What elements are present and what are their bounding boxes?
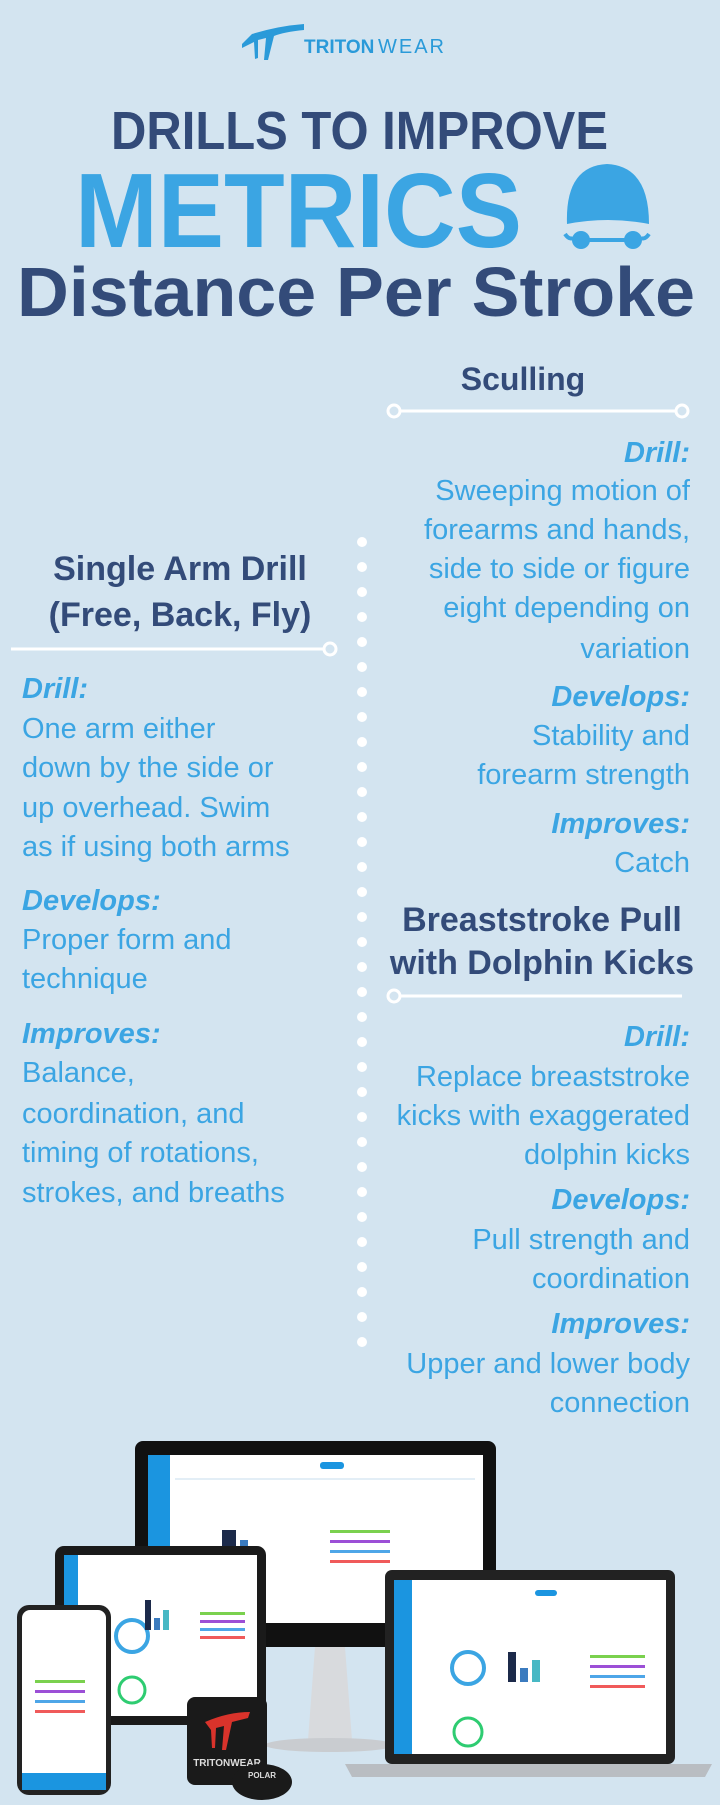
text: breaststroke details: Develops: [551, 1184, 690, 1216]
phone [17, 1605, 111, 1795]
text: single arm details: Develops: [22, 885, 161, 917]
text: breaststroke details: Drill: [624, 1021, 690, 1053]
divider: sculling line [386, 404, 690, 418]
text: breaststroke details: coordination [532, 1263, 690, 1295]
heading: Breaststroke Pull: with Dolphin Kicks [390, 944, 694, 982]
title: Distance Per Stroke [17, 253, 695, 330]
text: sculling details: Sweeping motion of [435, 475, 690, 507]
title: DRILLS TO IMPROVE [111, 101, 608, 161]
text: single arm details: Proper form and [22, 924, 232, 956]
text: sculling details: Develops: [551, 681, 690, 713]
text: breaststroke details: kicks with exaggerated [397, 1100, 690, 1132]
text: sculling details: forearm strength [477, 759, 690, 791]
heading: Single Arm Drill [49, 550, 311, 634]
text: single arm details: One arm either [22, 713, 215, 745]
divider: breaststroke line [386, 988, 682, 1004]
text: single arm details: Balance, [22, 1057, 135, 1089]
text: breaststroke details: Upper and lower body [406, 1348, 690, 1380]
text: single arm details: strokes, and breaths [22, 1177, 285, 1209]
icon: swim cap with goggles [563, 164, 651, 249]
text: sculling details: forearms and hands, [424, 514, 690, 546]
text: breaststroke details: connection [550, 1387, 690, 1419]
tablet [55, 1546, 266, 1725]
laptop [345, 1570, 712, 1777]
heading: Breaststroke Pull: Breaststroke Pull [402, 901, 682, 939]
logo: WEAR [378, 36, 446, 58]
text: sculling details: side to side or figure [429, 553, 690, 585]
heading: Single Arm Drill: (Free, Back, Fly) [49, 596, 311, 634]
text: single arm details: timing of rotations, [22, 1137, 259, 1169]
title [17, 101, 695, 330]
heading: Breaststroke Pull [390, 901, 694, 982]
text: sculling details: Catch [614, 847, 690, 879]
sensor: TRITONWEAR [193, 1758, 262, 1769]
text: sculling details: variation [580, 633, 690, 665]
text: breaststroke details: Pull strength and [472, 1224, 690, 1256]
title: METRICS [75, 152, 522, 270]
heart rate sensor: POLAR [248, 1771, 276, 1780]
text: sculling details [424, 437, 690, 879]
text: breaststroke details: Replace breaststroke [416, 1061, 690, 1093]
text: single arm details: technique [22, 963, 148, 995]
divider: single arm line [11, 642, 338, 656]
logo: TRITON [304, 37, 374, 58]
text: single arm details: Drill: [22, 673, 88, 705]
text: single arm details: down by the side or [22, 752, 273, 784]
text: single arm details: as if using both arms [22, 831, 290, 863]
text: breaststroke details: Improves: [551, 1308, 690, 1340]
heading: Single Arm Drill: Single Arm Drill [53, 550, 307, 588]
text: breaststroke details [397, 1021, 690, 1419]
text: single arm details: Improves: [22, 1018, 161, 1050]
sensor [187, 1697, 267, 1785]
heart rate sensor [232, 1764, 292, 1800]
devices illustration [17, 1441, 712, 1800]
text: sculling details: eight depending on [443, 592, 690, 624]
monitor [135, 1441, 496, 1752]
text: single arm details [22, 673, 290, 1209]
text: single arm details: coordination, and [22, 1098, 244, 1130]
dotted vertical line [357, 537, 367, 1347]
logo [242, 24, 446, 60]
text: sculling details: Drill: [624, 437, 690, 469]
text: sculling details: Stability and [532, 720, 690, 752]
heading: Sculling: Sculling [461, 361, 585, 397]
text: single arm details: up overhead. Swim [22, 792, 270, 824]
text: sculling details: Improves: [551, 808, 690, 840]
text: breaststroke details: dolphin kicks [524, 1139, 690, 1171]
